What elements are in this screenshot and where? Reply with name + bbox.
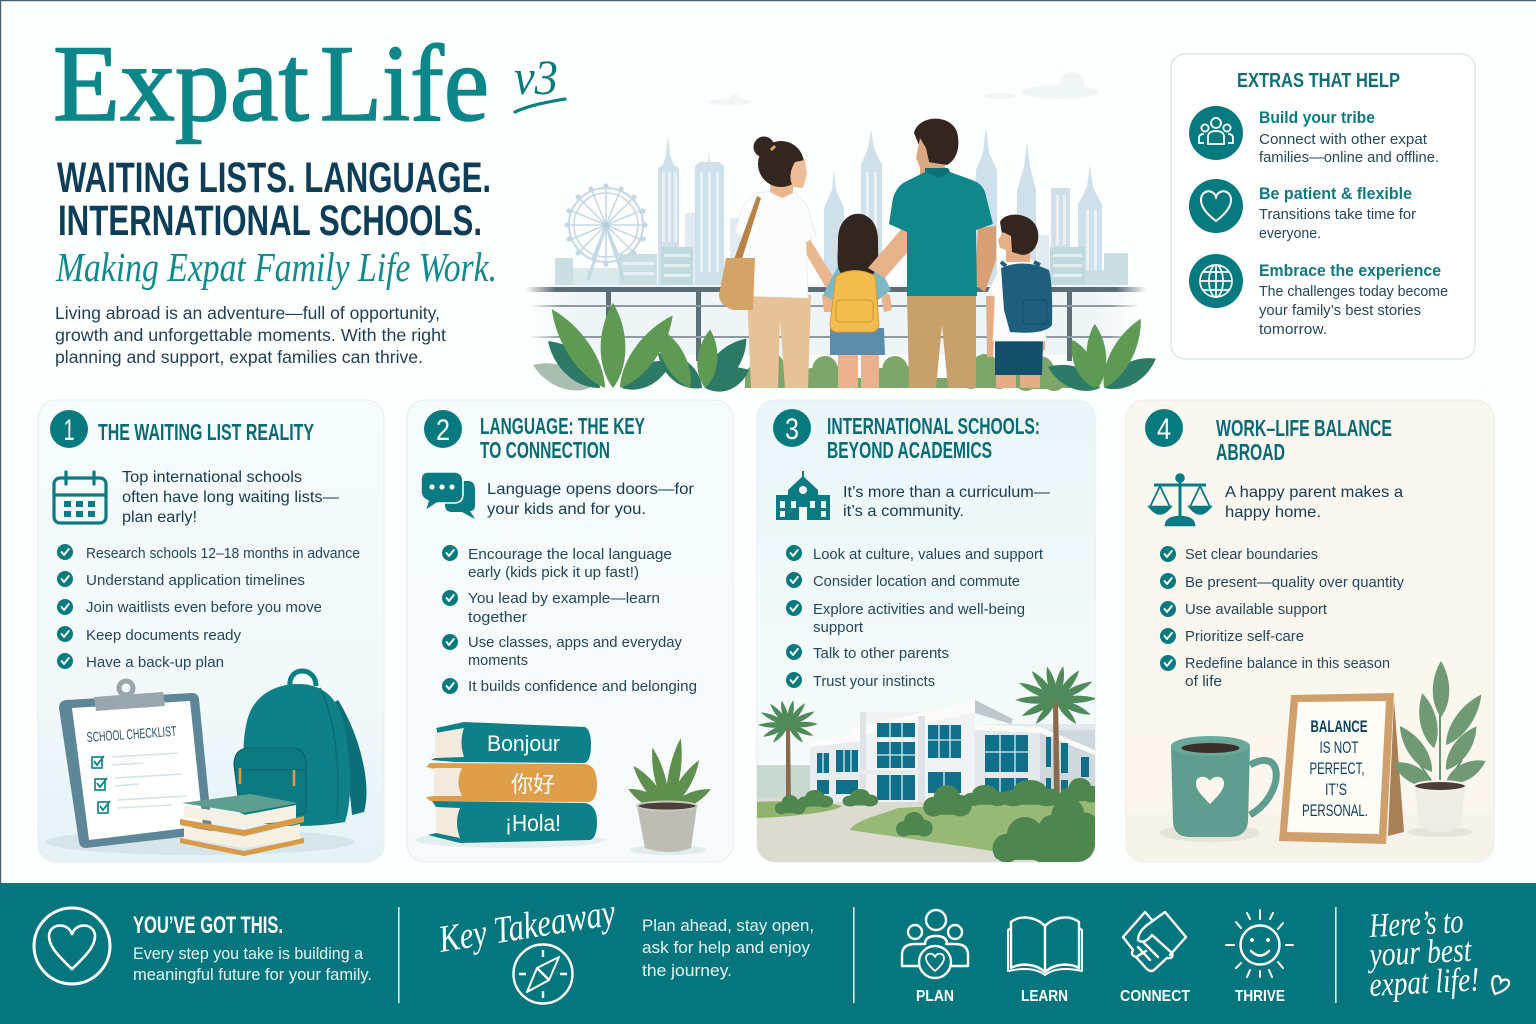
potted plant (1389, 661, 1489, 832)
illustration: school campus (757, 665, 1106, 865)
checklist: Prioritize self-care (1185, 628, 1304, 645)
extra: embrace the experience: your family’s best stories (1259, 302, 1421, 319)
version mark v3: v3 (514, 49, 558, 105)
connect icon and label: CONNECT (1120, 988, 1190, 1005)
checklist: Encourage the local language (468, 546, 672, 563)
extra: be patient and flexible: Transitions take time for (1259, 206, 1416, 223)
lead text (843, 484, 1050, 520)
illustration: mug, sign and plant (1127, 661, 1493, 861)
clouds (708, 72, 1098, 106)
number badge 4: 4 (1157, 413, 1171, 446)
checklist (786, 545, 1044, 690)
icon: calendar (54, 472, 106, 523)
number badge 4 (1145, 409, 1183, 447)
closing script message: Here’s to (1368, 903, 1464, 945)
mug (1171, 736, 1276, 837)
number badge 1: 1 (64, 414, 74, 447)
heading: WORK–LIFE BALANCE (1216, 415, 1392, 441)
main heading: INTERNATIONAL SCHOOLS. (58, 197, 482, 245)
mother (719, 136, 835, 388)
header: title and intro (53, 23, 565, 367)
heading (1216, 415, 1392, 465)
checklist: You lead by example—learn (468, 590, 660, 607)
checklist: Redefine balance in this season (1185, 655, 1390, 672)
heading: ABROAD (1216, 439, 1285, 465)
intro paragraph: Living abroad is an adventure—full of opportunity, (55, 303, 440, 323)
checklist: Research schools 12–18 months in advance (86, 545, 360, 562)
lead text: A happy parent makes a (1225, 484, 1403, 501)
illustration: language books: Bonjour (487, 731, 560, 756)
water and railing (525, 285, 1147, 361)
boy (986, 215, 1052, 388)
checklist: It builds confidence and belonging (468, 678, 697, 695)
footer band (0, 883, 1536, 1024)
sign frame: PERSONAL. (1302, 801, 1368, 820)
checklist: Set clear boundaries (1185, 546, 1318, 563)
extra: build your tribe: Build your tribe (1259, 109, 1375, 127)
closing script message: your best (1366, 932, 1474, 974)
plan icon and label (902, 910, 968, 1005)
illustration: language books: 你好 (511, 767, 555, 799)
encouragement message: YOU’VE GOT THIS. (133, 912, 283, 939)
checklist: Use classes, apps and everyday (468, 634, 682, 651)
palm trees (758, 665, 1097, 808)
illustration: clipboard, backpack and books: SCHOOL CHECKLIST (86, 723, 177, 745)
girl (822, 214, 892, 388)
checklist: Be present—quality over quantity (1185, 574, 1404, 591)
shrubs (775, 778, 1106, 865)
extra: build your tribe: families—online and offline. (1259, 149, 1439, 166)
extra: be patient and flexible (1189, 179, 1416, 242)
thrive icon and label (1226, 910, 1293, 1005)
heading: THE WAITING LIST REALITY (98, 419, 314, 445)
extra: build your tribe (1189, 106, 1439, 166)
icon: small heart (1492, 976, 1509, 994)
ground hedges (745, 352, 1085, 391)
heading: INTERNATIONAL SCHOOLS: (827, 413, 1040, 439)
extra: be patient and flexible: Be patient & flexible (1259, 185, 1412, 203)
key takeaway: Key Takeaway (435, 892, 618, 961)
checklist: Keep documents ready (86, 627, 241, 644)
checklist: moments (468, 652, 528, 669)
extra: embrace the experience (1189, 254, 1448, 338)
closing script message: expat life! (1368, 961, 1480, 1004)
title (53, 23, 489, 144)
lead text: your kids and for you. (487, 501, 646, 518)
illustration: clipboard, backpack and books (45, 671, 366, 856)
heading (480, 413, 645, 463)
lead text: It’s more than a curriculum— (843, 484, 1050, 501)
sign frame: IT’S (1325, 780, 1347, 799)
lead text: plan early! (122, 509, 197, 526)
lead text: Language opens doors—for (487, 481, 695, 498)
icon: heart in circle (34, 908, 110, 984)
lead text: Top international schools (122, 469, 302, 486)
thrive icon and label: THRIVE (1235, 988, 1285, 1005)
panel heading: EXTRAS THAT HELP (1237, 70, 1400, 92)
sign frame: PERFECT, (1310, 759, 1364, 778)
heading: TO CONNECTION (480, 437, 610, 463)
illustration: language books (415, 722, 713, 855)
extra: build your tribe: Connect with other expat (1259, 131, 1428, 148)
number badge 2 (424, 410, 462, 448)
checklist: of life (1185, 673, 1222, 690)
sign frame: BALANCE (1310, 717, 1368, 736)
heading (827, 413, 1040, 463)
intro paragraph: growth and unforgettable moments. With the right (55, 325, 446, 345)
key takeaway (435, 892, 814, 1004)
lead text: it’s a community. (843, 503, 964, 520)
script subtitle: Making Expat Family Life Work. (55, 244, 497, 290)
panel 4: work-life balance (1126, 400, 1494, 862)
checklist: Consider location and commute (813, 573, 1020, 590)
learn icon and label (1008, 917, 1082, 1005)
sign frame: IS NOT (1320, 738, 1358, 757)
plants left (529, 303, 756, 398)
icon: speech bubbles (421, 472, 475, 519)
checklist: early (kids pick it up fast!) (468, 564, 639, 581)
key takeaway: the journey. (642, 961, 732, 980)
lead text (122, 469, 339, 526)
encouragement message (34, 908, 372, 984)
connect icon and label (1120, 912, 1190, 1005)
lead text: happy home. (1225, 504, 1321, 521)
checklist: Have a back-up plan (86, 654, 224, 671)
title: Expat (53, 23, 309, 144)
checklist: support (813, 619, 864, 636)
checklist: Join waitlists even before you move (86, 599, 322, 616)
number badge 3: 3 (785, 413, 799, 446)
checklist: Talk to other parents (813, 645, 949, 662)
intro paragraph (55, 303, 446, 367)
lead text (487, 481, 695, 518)
heading: BEYOND ACADEMICS (827, 437, 992, 463)
extra: embrace the experience: tomorrow. (1259, 321, 1327, 338)
panel 1: the waiting list reality (38, 400, 384, 862)
title: Life (320, 23, 489, 144)
checklist: Explore activities and well-being (813, 601, 1025, 618)
checklist: Trust your instincts (813, 673, 935, 690)
intro paragraph: planning and support, expat families can thrive. (55, 347, 423, 367)
checklist: Look at culture, values and support (813, 546, 1044, 563)
number badge 1 (50, 410, 88, 448)
checklist: Understand application timelines (86, 572, 305, 589)
checklist (57, 544, 360, 671)
panel: extras that help (1171, 54, 1475, 359)
extra: be patient and flexible: everyone. (1259, 225, 1321, 242)
ferris wheel (564, 183, 648, 280)
illustration: family looking at skyline (525, 72, 1161, 398)
number badge 2: 2 (436, 414, 450, 447)
number badge 3 (773, 409, 811, 447)
closing script message (1366, 903, 1509, 1004)
city skyline (555, 127, 1128, 285)
panel 3: international schools (757, 400, 1106, 865)
heading: LANGUAGE: THE KEY (480, 413, 645, 439)
illustration: language books: ¡Hola! (505, 810, 561, 836)
father (868, 119, 996, 388)
extra: embrace the experience: The challenges today become (1259, 283, 1448, 300)
icon: scales (1150, 474, 1210, 525)
sign frame (1279, 693, 1404, 844)
school building (809, 700, 1095, 802)
learn icon and label: LEARN (1021, 988, 1068, 1005)
checklist: together (468, 609, 527, 626)
extra: embrace the experience: Embrace the experience (1259, 262, 1441, 280)
checklist: Use available support (1185, 601, 1328, 618)
icon: school building (776, 471, 830, 520)
main heading: WAITING LISTS. LANGUAGE. (57, 154, 491, 202)
panel 2: language (407, 400, 733, 862)
encouragement message: Every step you take is building a (133, 944, 364, 963)
key takeaway: ask for help and enjoy (642, 938, 810, 957)
checklist (1160, 546, 1404, 690)
lead text: often have long waiting lists— (122, 489, 339, 506)
encouragement message: meaningful future for your family. (133, 965, 372, 984)
icon: compass (514, 944, 572, 1004)
plan icon and label: PLAN (916, 988, 954, 1005)
lead text (1225, 484, 1403, 521)
checklist (442, 545, 697, 695)
key takeaway: Plan ahead, stay open, (642, 916, 814, 935)
main heading (57, 154, 491, 245)
plants right (1044, 314, 1161, 398)
